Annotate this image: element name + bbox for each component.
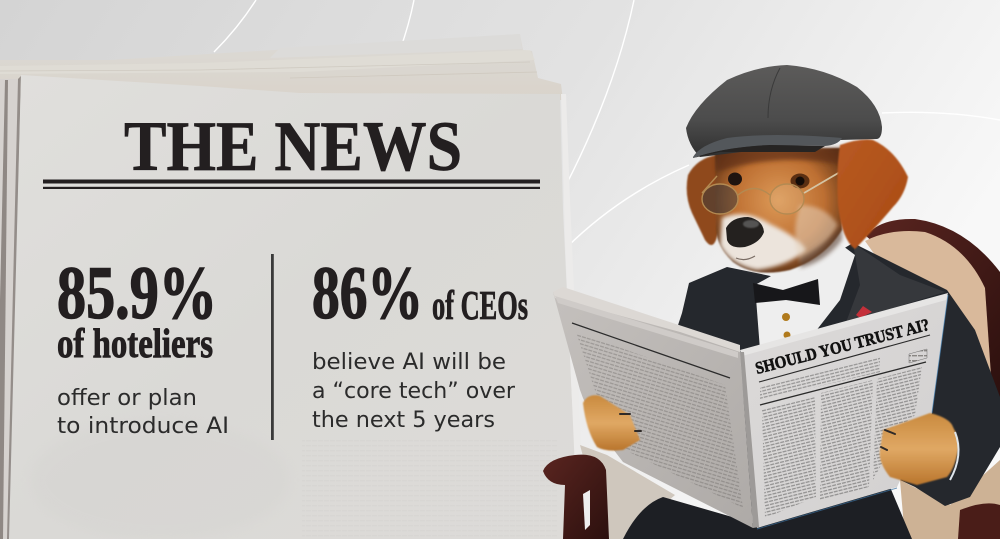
masthead print	[760, 356, 880, 400]
back pages	[0, 34, 563, 100]
chair right lower upholstery	[900, 460, 1000, 539]
nose	[726, 217, 764, 247]
cuff	[950, 432, 959, 480]
divider	[271, 254, 274, 440]
front page	[9, 75, 581, 539]
right paw	[880, 413, 959, 485]
jacket body	[640, 243, 1000, 520]
left page print	[576, 332, 743, 508]
left paw	[583, 395, 641, 451]
glasses	[702, 172, 840, 214]
left page top edge	[553, 287, 740, 352]
chair right arm wood	[958, 503, 1000, 539]
faint show-through print	[302, 440, 557, 539]
seam	[768, 68, 780, 118]
right page top edge	[740, 293, 948, 356]
stat: CEOs	[312, 252, 528, 433]
shirt	[755, 240, 855, 350]
eyes	[728, 172, 810, 188]
cheek fur	[795, 205, 838, 262]
chair leg gap	[583, 490, 590, 530]
claws	[881, 430, 895, 450]
value 86%: 86%	[312, 252, 423, 335]
pocket square	[856, 306, 872, 318]
right page rules	[759, 335, 930, 405]
chair back upholstery	[865, 231, 992, 390]
paw shape	[583, 395, 640, 451]
newspaper	[553, 287, 948, 529]
description: to introduce AI	[57, 414, 229, 439]
description: the next 5 years	[312, 408, 495, 433]
left page edges	[0, 79, 21, 539]
head	[715, 148, 842, 273]
title double rule	[43, 180, 540, 189]
left page rule	[572, 323, 730, 378]
flat cap	[686, 65, 882, 158]
newspaper stack	[0, 34, 585, 539]
nose highlight	[743, 220, 759, 228]
right edge highlight	[561, 94, 585, 539]
armchair	[543, 219, 1000, 539]
stat: hoteliers	[57, 252, 229, 439]
right page columns	[762, 367, 922, 518]
suit	[623, 240, 1000, 539]
left ear	[687, 155, 722, 245]
description	[312, 350, 516, 433]
spine	[740, 352, 759, 528]
description: a “core tech” over	[312, 379, 516, 404]
right ear	[837, 140, 908, 249]
neck shadow	[800, 225, 842, 268]
right page	[740, 295, 948, 528]
label of CEOs: of CEOs	[432, 282, 528, 328]
lapel highlight	[845, 243, 945, 325]
description: offer or plan	[57, 386, 197, 411]
label of hoteliers: of hoteliers	[57, 320, 213, 366]
chair left arm wood	[543, 455, 609, 539]
barcode	[909, 349, 927, 363]
crown	[686, 65, 882, 157]
brim	[693, 135, 842, 158]
trousers	[623, 487, 912, 539]
mouth	[736, 256, 755, 260]
description: believe AI will be	[312, 350, 506, 375]
forehead shadow	[716, 148, 842, 172]
blue edge	[932, 295, 948, 413]
chair back wood	[866, 219, 1000, 400]
soft paper shading	[30, 420, 290, 539]
gold buttons	[782, 313, 790, 338]
description	[57, 386, 229, 439]
bow tie	[753, 279, 820, 305]
claws	[620, 414, 641, 431]
muzzle	[720, 214, 806, 270]
value 85.9%: 85.9%	[57, 252, 217, 335]
chair left upholstery	[580, 445, 675, 539]
paw shape	[880, 413, 958, 485]
title: THE NEWS	[124, 108, 462, 186]
dog illustration	[543, 65, 1000, 539]
decorative white curves	[214, 0, 1000, 247]
headline: SHOULD YOU TRUST AI?	[753, 315, 931, 378]
left page	[553, 292, 753, 528]
